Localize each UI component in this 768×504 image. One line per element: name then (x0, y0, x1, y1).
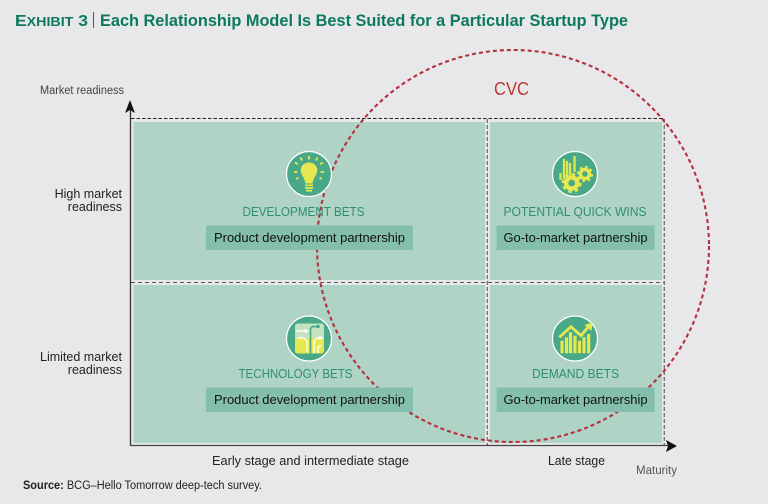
heading: demand bets: DEMAND BETS (532, 366, 619, 381)
cell: development bets (206, 152, 413, 250)
horizontal axis (130, 440, 677, 452)
row label: limited market readiness: Limited market (40, 350, 123, 364)
panel: technology bets background (134, 285, 485, 443)
row label: high market readiness (55, 187, 123, 214)
label: go-to-market partnership: Go-to-market partnership (504, 230, 648, 245)
label: go-to-market partnership (496, 388, 654, 412)
source note: Source: BCG–Hello Tomorrow deep-tech survey. (23, 480, 262, 492)
row label: limited market readiness (40, 350, 123, 377)
panel: development bets background (134, 122, 485, 280)
heading: technology bets: TECHNOLOGY BETS (238, 366, 353, 381)
cell: technology bets (206, 316, 413, 412)
heading: development bets: DEVELOPMENT BETS (242, 204, 365, 219)
icon: light bulb (286, 152, 332, 196)
label: go-to-market partnership: Go-to-market partnership (504, 392, 648, 407)
grid dashed lines (131, 118, 664, 445)
icon: growth bar chart (552, 316, 598, 361)
label: go-to-market partnership (496, 226, 654, 250)
CVC dashed circle (317, 50, 709, 442)
y axis title: Market readiness (40, 85, 124, 97)
icon: circuit board (286, 316, 332, 361)
row label: high market readiness: High market (55, 187, 123, 201)
row label: limited market readiness: readiness (68, 363, 122, 377)
x axis title: Maturity (636, 465, 677, 477)
panel: potential quick wins background (490, 122, 662, 280)
column label: late stage: Late stage (548, 453, 605, 468)
column label: early stage: Early stage and intermediate stage (212, 453, 409, 468)
cell: demand bets (496, 316, 654, 412)
cell: potential quick wins (496, 152, 654, 250)
panel: demand bets background (490, 285, 662, 443)
label: product development partnership: Product development partnership (214, 392, 405, 407)
heading: potential quick wins: POTENTIAL QUICK WINS (504, 204, 647, 219)
label: product development partnership (206, 226, 413, 250)
CVC label: CVC (494, 79, 529, 99)
vertical axis (125, 100, 135, 446)
row label: high market readiness: readiness (68, 200, 122, 214)
title: Each Relationship Model Is Best Suited for a Particular Startup Type (100, 12, 628, 30)
label: product development partnership: Product development partnership (214, 230, 405, 245)
title: EXHIBIT 3 (15, 13, 88, 30)
label: product development partnership (206, 388, 413, 412)
icon: chart with gears (552, 152, 598, 196)
